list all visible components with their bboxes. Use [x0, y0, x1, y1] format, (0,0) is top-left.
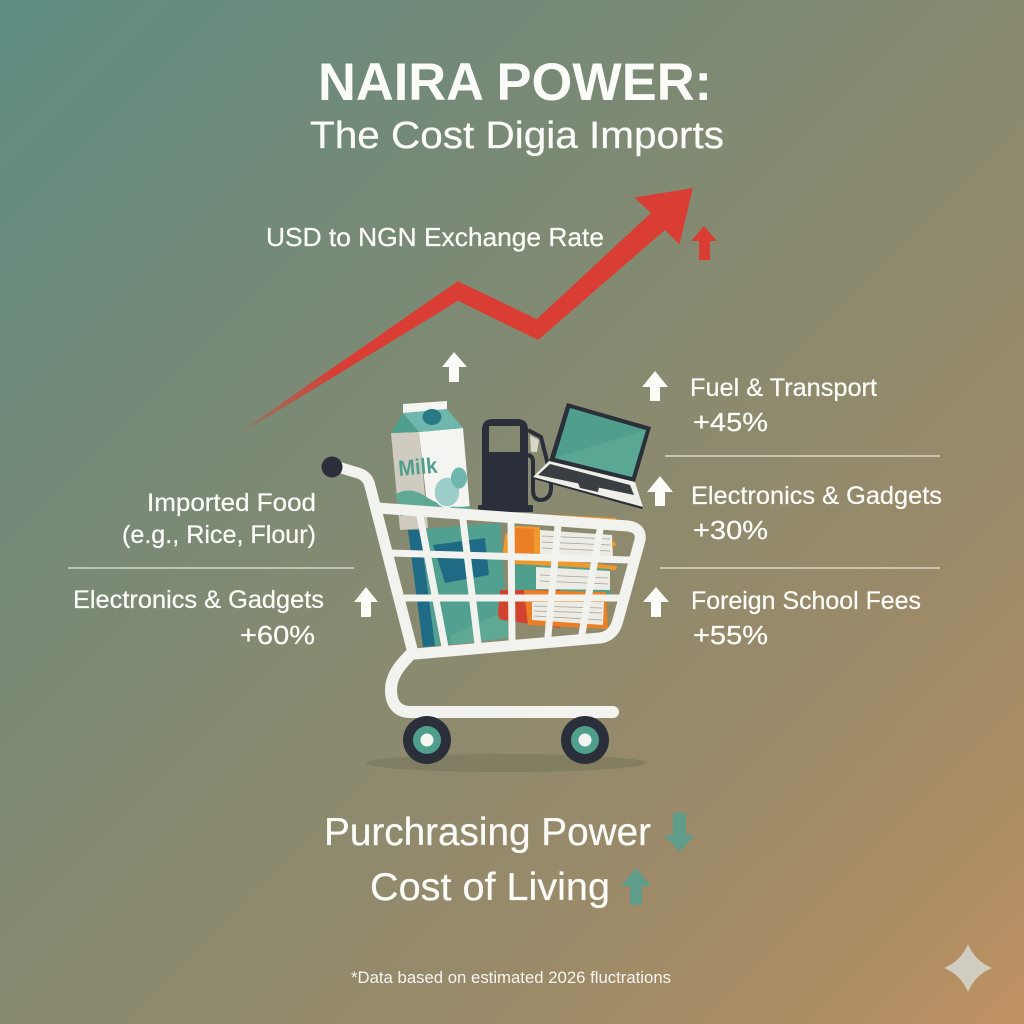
- icon: fuel pump: [478, 419, 551, 512]
- title: NAIRA POWER:: [318, 53, 712, 112]
- callout: imported food: [122, 489, 316, 549]
- callout: foreign school fees: [643, 587, 921, 650]
- callout: electronics and gadgets right: +30%: [693, 515, 768, 545]
- large teal box: [408, 523, 508, 647]
- callout: electronics and gadgets left: +60%: [240, 620, 315, 650]
- icon: sparkle: [944, 944, 992, 992]
- milk carton: [391, 401, 470, 530]
- callout: electronics and gadgets left: [73, 586, 378, 650]
- wheel left: [403, 716, 451, 764]
- icon: up arrow: [621, 868, 651, 905]
- callout: fuel and transport: [642, 371, 877, 437]
- callout: imported food: Imported Food: [147, 489, 316, 517]
- cart shadow: [366, 754, 646, 772]
- icon: up arrow: [354, 587, 378, 617]
- stack of books: [498, 513, 617, 629]
- callout: electronics and gadgets right: [647, 476, 942, 545]
- callout: foreign school fees: +55%: [693, 620, 768, 650]
- wheel right: [561, 716, 609, 764]
- arrow: rising exchange rate line: [237, 189, 692, 435]
- icon: small red up arrow: [691, 226, 717, 260]
- icon: down arrow: [664, 813, 695, 852]
- footnote: *Data based on estimated 2026 fluctrations: [351, 968, 671, 987]
- milk label: Milk: [397, 453, 439, 481]
- callout: electronics and gadgets right: Electronics & Gadgets: [691, 482, 942, 510]
- title: [310, 53, 724, 157]
- callout: imported food: (e.g., Rice, Flour): [122, 521, 316, 549]
- callout: foreign school fees: Foreign School Fees: [691, 587, 921, 615]
- icon: up arrow: [647, 476, 673, 506]
- icon: white up arrow above cart: [442, 352, 467, 382]
- summary: purchasing power: Purchrasing Power: [324, 811, 651, 854]
- callout: electronics and gadgets left: Electronics & Gadgets: [73, 586, 324, 614]
- exchange rate label: USD to NGN Exchange Rate: [266, 222, 604, 252]
- callout: fuel and transport: +45%: [693, 407, 768, 437]
- title: The Cost Digia Imports: [310, 115, 724, 157]
- summary: cost of living: Cost of Living: [370, 866, 610, 909]
- icon: up arrow: [642, 371, 668, 401]
- cart frame: [338, 467, 640, 712]
- handle grip: [322, 456, 342, 478]
- shopping cart with goods: [322, 401, 651, 772]
- callout: fuel and transport: Fuel & Transport: [690, 374, 877, 402]
- icon: up arrow: [643, 587, 669, 617]
- icon: laptop: [533, 403, 651, 509]
